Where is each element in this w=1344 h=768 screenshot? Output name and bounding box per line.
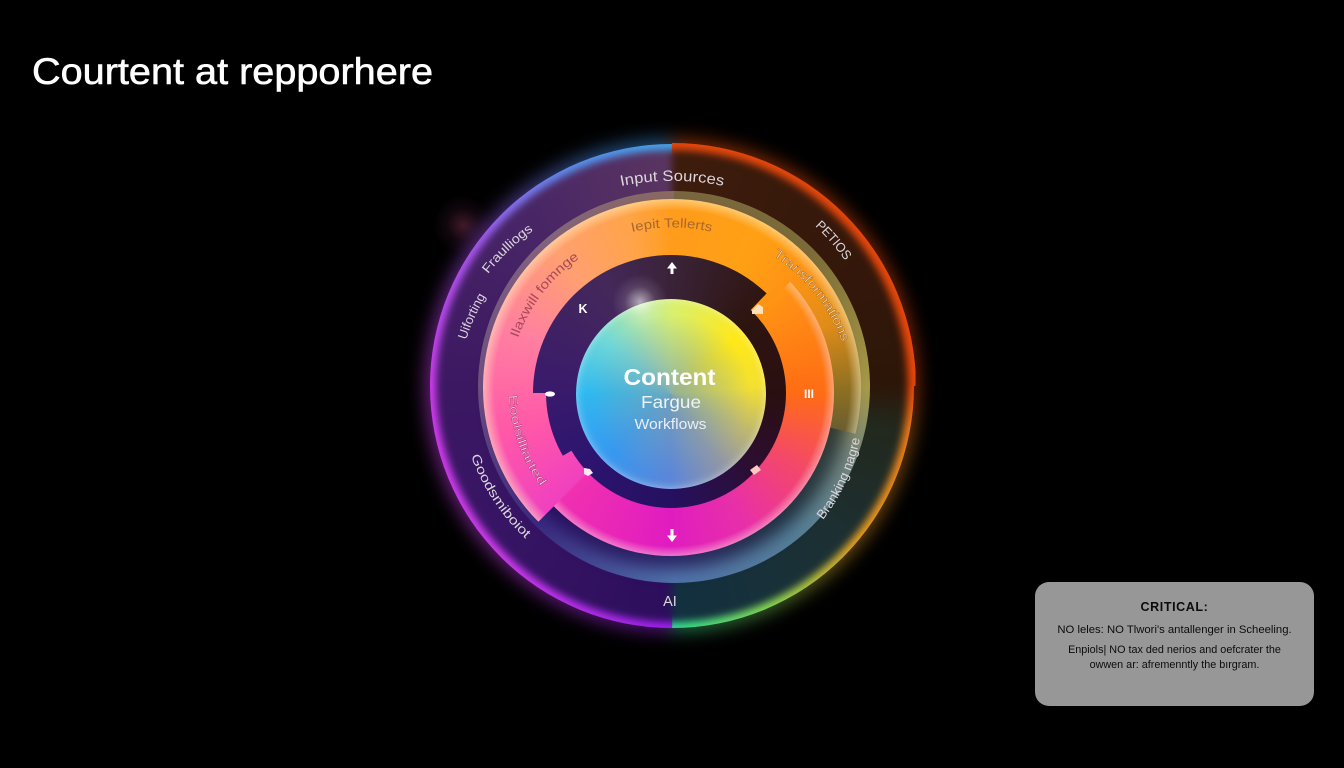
label: petios: PETIOS <box>816 220 851 260</box>
label: eoolsilliarted: Eoolsilliarted <box>508 396 548 486</box>
label: transformations: Transformations <box>776 248 848 341</box>
center circle <box>576 298 766 488</box>
label: uiforting: Uiforting <box>458 294 487 338</box>
outer ring upper right lip <box>672 143 916 386</box>
center label: Workflows: Workflows <box>634 417 706 433</box>
callout: critical note <box>1035 582 1314 706</box>
label: input sources: Input Sources <box>620 170 724 186</box>
middle ring: lower segment <box>554 282 834 556</box>
callout heading: CRITICAL: <box>1141 600 1208 614</box>
icon: left marker <box>545 391 555 397</box>
callout lines 2-3: owwen ar: afremenntly the bırgram. <box>1090 659 1259 671</box>
icon: upper right marker <box>752 304 763 314</box>
icon: K marker: K <box>578 302 588 316</box>
decorative glow spot <box>433 195 493 255</box>
middle ring: lower left patch <box>491 442 585 522</box>
label: ilaxwill fomnge: Ilaxwill fomnge <box>510 254 578 336</box>
label: AI: AI <box>663 594 677 610</box>
icon: III marker: III <box>804 387 814 401</box>
icon: up arrow <box>667 262 677 274</box>
band inner shade <box>494 212 850 568</box>
label: goodsmiboiot: Goodsmiboiot <box>472 454 530 539</box>
inner dark ring <box>556 278 786 508</box>
label: branking nagre: Branking nagre <box>816 438 860 520</box>
icon: lower right marker <box>750 465 761 475</box>
callout lines 2-3: Enpiols| NO tax ded nerios and oefcrater the <box>1068 644 1281 656</box>
icon: down arrow <box>667 529 677 542</box>
callout line 1: NO leles: NO Tlwori's antallenger in Scheeling. <box>1057 624 1292 636</box>
middle ring: upper segment <box>483 199 861 522</box>
outer ring rim <box>430 144 914 628</box>
light band ring <box>478 191 870 583</box>
outer ring glow <box>425 139 918 632</box>
callout lines 2-3 <box>1068 644 1281 671</box>
diagram: content workflow rings <box>412 126 930 644</box>
label: input tellers: Iepit Tellerts <box>632 218 712 232</box>
center label: Content: Content <box>624 364 716 390</box>
icon: lower left marker <box>584 468 593 476</box>
inner dark ring: left notch <box>546 393 572 456</box>
inner dark ring: upper notch <box>533 255 766 393</box>
title: Courtent at repporhere <box>32 51 433 92</box>
outer ring dark fill <box>436 150 908 622</box>
label: fraulliogs: Fraulliogs <box>482 226 532 274</box>
center highlight <box>612 274 668 330</box>
center label: Fargue: Fargue <box>641 392 701 412</box>
